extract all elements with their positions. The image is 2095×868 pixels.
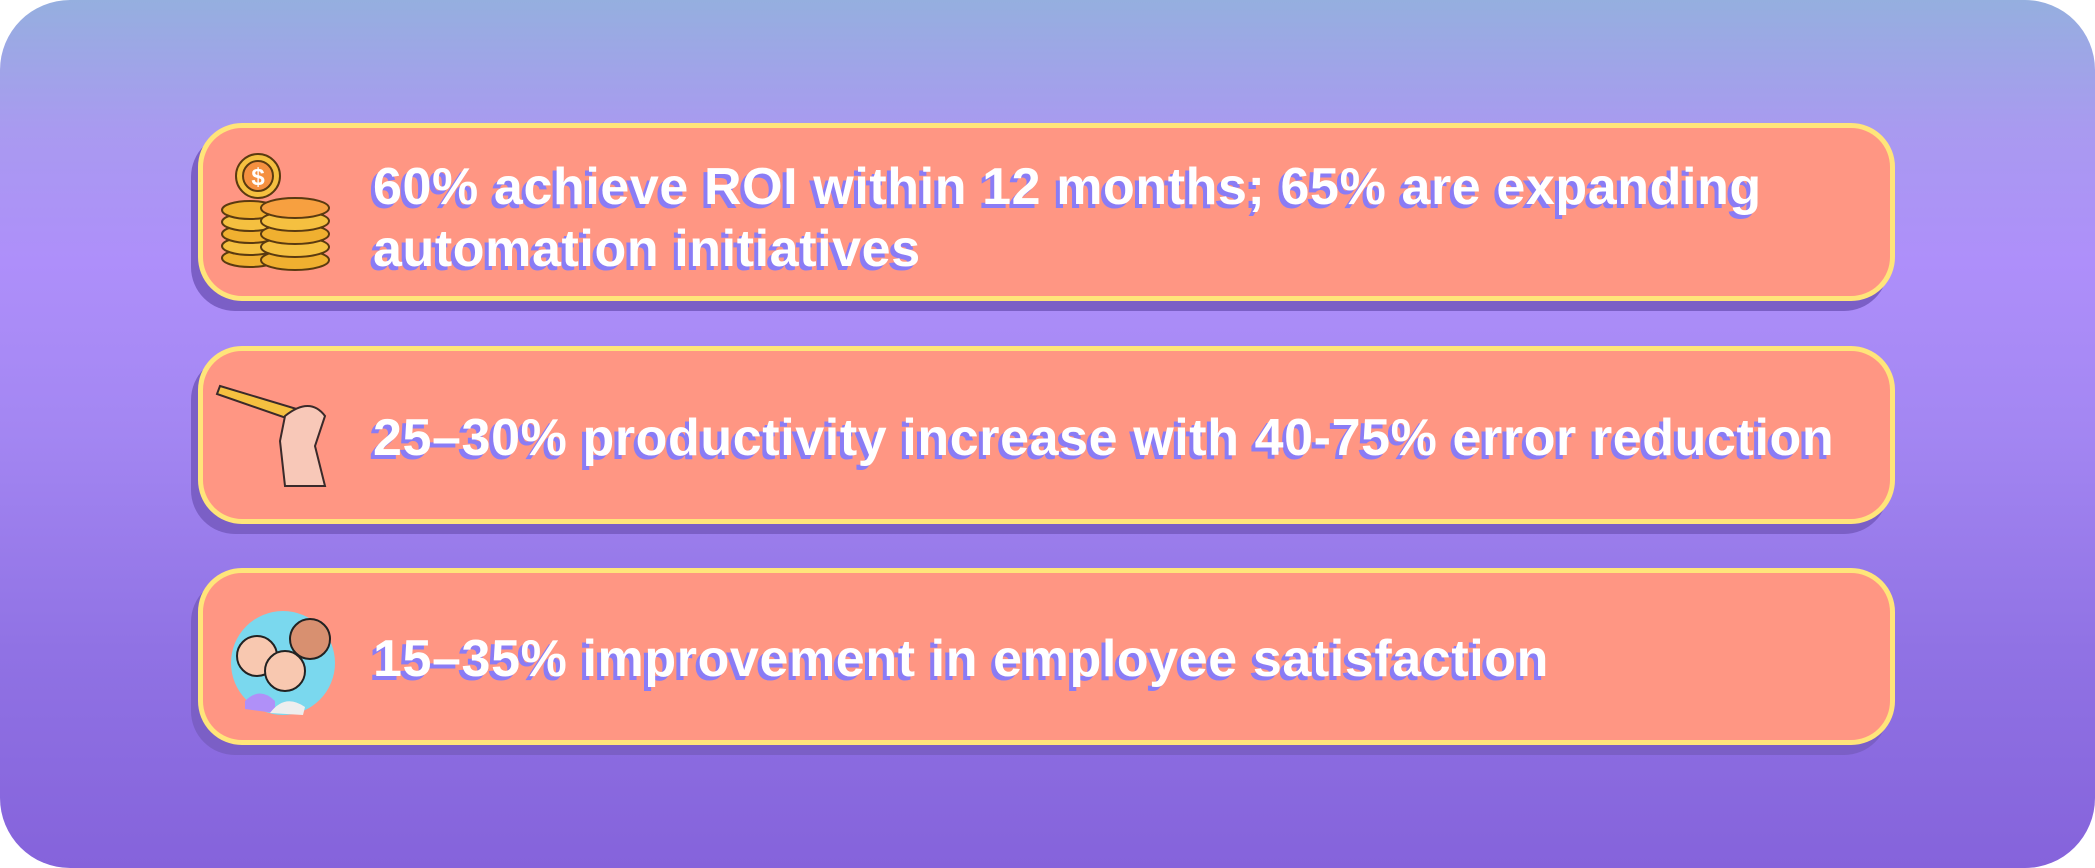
text: ROI stat: [370, 158, 1762, 278]
text: ROI stat: automation initiatives: [373, 220, 921, 278]
text: satisfaction stat: 15–35% improvement in employee satisfaction: [373, 630, 1549, 688]
icon: hand with pencil: [216, 384, 326, 487]
icon: coin stacks: $: [251, 164, 265, 191]
card 1: ROI: [198, 123, 1895, 301]
card 3: satisfaction: [198, 568, 1895, 745]
card 2: productivity: [198, 346, 1895, 524]
text: productivity stat: 25–30% productivity increase with 40-75% error reduction: [373, 409, 1834, 467]
text: ROI stat: 60% achieve ROI within 12 months; 65% are expanding: [373, 158, 1762, 216]
icon: coin stacks: [221, 153, 330, 271]
icon: people group: [231, 611, 335, 715]
